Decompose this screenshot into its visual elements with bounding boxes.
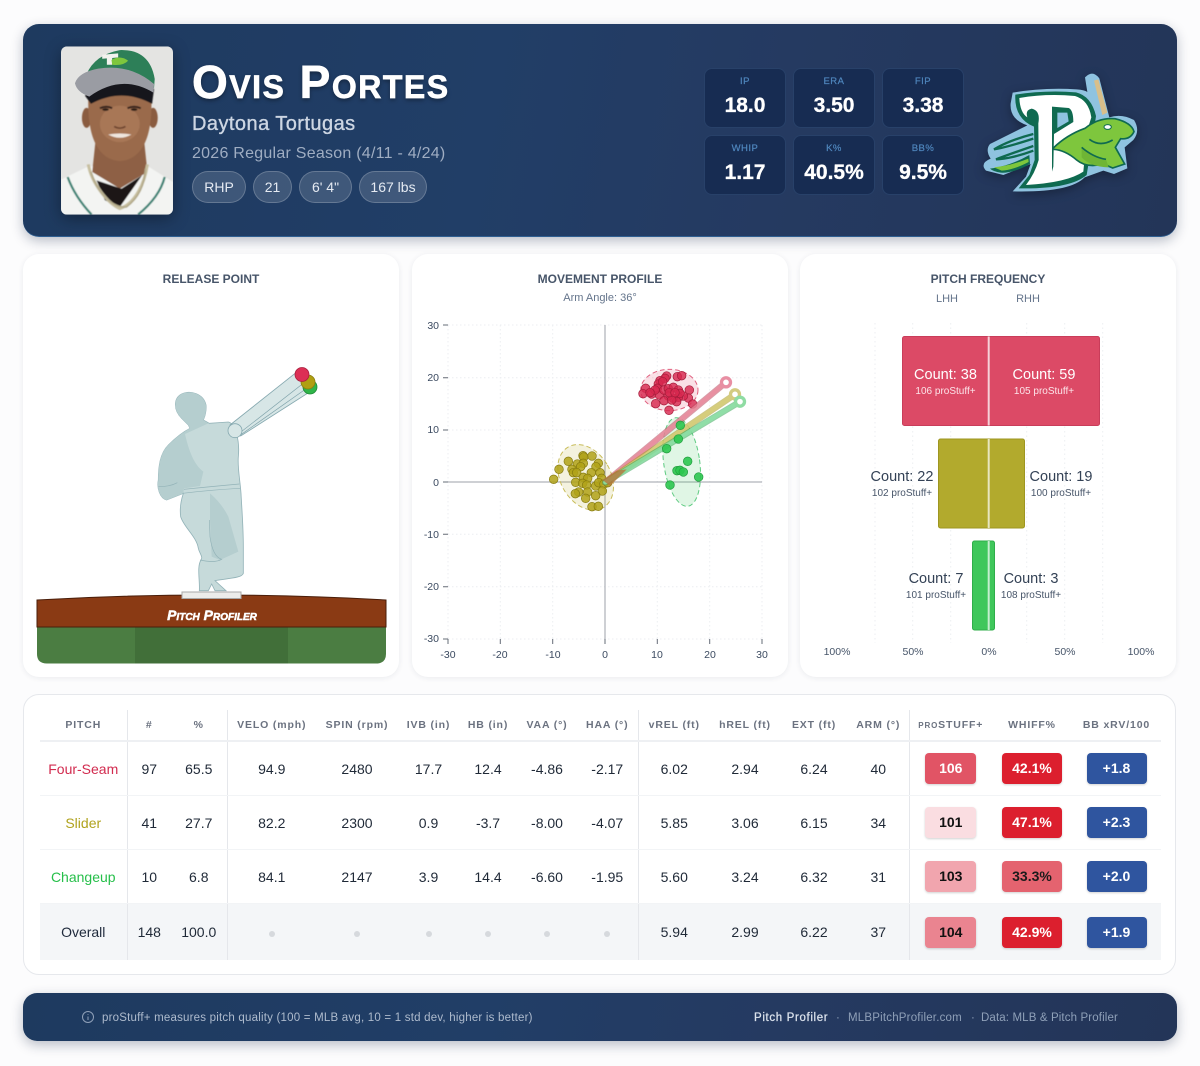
red four-seam points (639, 371, 697, 415)
row: slider (65, 807, 1148, 840)
four-seam bar (902, 336, 1100, 426)
y axis labels (424, 320, 439, 645)
four-seam bar: 105 proStuff+ (1014, 386, 1074, 397)
table header: EXT (ft) (792, 719, 836, 731)
four-seam bar: Count: 59 (1013, 367, 1075, 383)
four-seam bar: 106 proStuff+ (915, 386, 976, 397)
row: changeup: 10 (141, 868, 157, 884)
row: four-seam (48, 753, 1148, 786)
metrics table (40, 710, 1161, 960)
stat cards: 3.50 (814, 94, 854, 117)
footer credit: · (836, 1012, 840, 1024)
team logo (983, 74, 1139, 197)
arm angle end markers (721, 378, 744, 406)
frequency chart (824, 293, 1154, 658)
table header: PITCH (65, 719, 101, 731)
table header: WHIFF% (1008, 719, 1056, 731)
table header: PROSTUFF+ (918, 719, 983, 731)
heading: movement profile: MOVEMENT PROFILE (538, 272, 662, 286)
row: overall: 100.0 (181, 924, 216, 940)
batter side labels (936, 293, 1040, 305)
stat cards: 40.5% (804, 161, 864, 184)
row: slider: -4.07 (591, 814, 623, 830)
changeup bar: Count: 7 (909, 571, 963, 587)
footer credit: Data: MLB & Pitch Profiler (981, 1012, 1118, 1024)
row: changeup: 6.8 (189, 868, 208, 884)
slider bar: 102 proStuff+ (872, 488, 932, 499)
footer banner (23, 993, 1177, 1041)
batter side labels: LHH (936, 293, 958, 305)
row: overall: 2.99 (731, 924, 759, 940)
arm angle subtitle: Arm Angle: 36° (563, 292, 637, 304)
pitch profiler wordmark: Pitch Profiler (167, 607, 258, 623)
row: slider: 101 (939, 814, 962, 830)
x axis labels (440, 649, 768, 661)
row: changeup: 31 (870, 868, 886, 884)
chart axes (443, 325, 762, 644)
season: 2026 Regular Season (4/11 - 4/24) (192, 145, 445, 162)
row: four-seam: 40 (870, 760, 886, 776)
row: slider: 0.9 (419, 814, 438, 830)
x axis labels: 10 (651, 649, 663, 661)
row: overall: 6.22 (800, 924, 828, 940)
panel: release point (23, 254, 399, 677)
row: slider: 82.2 (258, 814, 285, 830)
row: overall: 5.94 (661, 924, 688, 940)
stat cards (705, 68, 964, 195)
row: slider: 34 (870, 814, 886, 830)
heading: pitch frequency: PITCH FREQUENCY (931, 272, 1045, 286)
row: four-seam: 42.1% (1012, 760, 1052, 776)
confidence ellipses (547, 369, 706, 520)
panel: movement profile (412, 254, 788, 677)
x axis labels: -10 (545, 649, 561, 661)
arm and release lines (228, 370, 313, 438)
player photo (56, 44, 179, 224)
batter side labels: RHH (1016, 293, 1040, 305)
row: overall: 37 (870, 924, 886, 940)
row: four-seam: 65.5 (185, 760, 212, 776)
footer credit: · (971, 1012, 975, 1024)
changeup bar (906, 541, 1061, 630)
table header: vREL (ft) (649, 719, 700, 731)
row: slider: 6.15 (800, 814, 828, 830)
row: slider: 5.85 (661, 814, 688, 830)
row: overall: Overall (61, 924, 105, 940)
percent axis labels: 100% (824, 646, 850, 658)
row: changeup: 6.32 (800, 868, 828, 884)
team name: Daytona Tortugas (192, 113, 356, 135)
table header: hREL (ft) (719, 719, 771, 731)
changeup bar: 108 proStuff+ (1001, 590, 1061, 601)
row: changeup: -6.60 (531, 868, 563, 884)
four-seam bar: Count: 38 (914, 367, 977, 383)
x axis labels: 30 (756, 649, 768, 661)
row: slider: +2.3 (1103, 814, 1130, 830)
player bio pills: 6' 4" (312, 179, 339, 195)
data layer (547, 369, 744, 520)
table header: IVB (in) (407, 719, 450, 731)
row: four-seam: 17.7 (415, 760, 442, 776)
pitcher mound (37, 595, 386, 627)
stat cards: FIP (915, 76, 931, 87)
arm angle lines (605, 382, 740, 482)
arm angle origin blob (603, 469, 627, 486)
table header: SPIN (rpm) (326, 719, 388, 731)
row: overall: +1.9 (1103, 924, 1130, 940)
footer credit: Pitch Profiler (754, 1012, 828, 1024)
row: overall: 104 (939, 924, 962, 940)
y axis labels: 10 (427, 424, 439, 436)
percent axis labels (824, 646, 1154, 658)
row: overall: 148 (138, 924, 161, 940)
slider bar: Count: 19 (1030, 469, 1092, 485)
y axis labels: -10 (424, 529, 439, 541)
y axis labels: 20 (427, 372, 439, 384)
row: four-seam: Four-Seam (48, 760, 118, 776)
footer credit (754, 1012, 1118, 1024)
row: changeup: 3.9 (419, 868, 438, 884)
stat cards: ERA (823, 76, 845, 87)
row: four-seam: 2.94 (731, 760, 759, 776)
row: four-seam: 94.9 (258, 760, 285, 776)
stat cards: BB% (912, 143, 934, 154)
percent axis labels: 50% (1054, 646, 1076, 658)
row: changeup: +2.0 (1103, 868, 1130, 884)
row: changeup: 33.3% (1012, 868, 1052, 884)
player bio pills (192, 171, 427, 203)
row: changeup: Changeup (51, 868, 116, 884)
row: changeup (51, 861, 1148, 894)
table header: BB xRV/100 (1083, 719, 1150, 731)
stat cards: IP (740, 76, 750, 87)
changeup bar: Count: 3 (1004, 571, 1058, 587)
frequency grid (875, 323, 1103, 643)
row: changeup: 14.4 (474, 868, 502, 884)
stat cards: WHIP (732, 143, 758, 154)
row: four-seam: 2480 (341, 760, 373, 776)
table header: VAA (°) (526, 719, 568, 731)
header banner (23, 24, 1177, 237)
row: four-seam: 106 (939, 760, 962, 776)
stat cards: 1.17 (725, 161, 765, 184)
row: four-seam: 12.4 (474, 760, 502, 776)
stat cards: K% (826, 143, 842, 154)
x axis labels: -30 (440, 649, 456, 661)
x axis labels: -20 (492, 649, 508, 661)
row: slider: 2300 (341, 814, 373, 830)
table header: ARM (°) (856, 719, 900, 731)
stat cards: 9.5% (899, 161, 947, 184)
row: overall (40, 904, 1161, 960)
player bio pills: 167 lbs (370, 179, 416, 195)
row: slider: -3.7 (476, 814, 500, 830)
x axis labels: 0 (602, 649, 608, 661)
stat cards: 3.38 (903, 94, 943, 117)
row: four-seam: 6.24 (800, 760, 828, 776)
y axis labels: -20 (424, 581, 439, 593)
row: four-seam: 97 (141, 760, 157, 776)
slider bar (871, 439, 1092, 528)
release points (295, 368, 317, 394)
y axis labels: -30 (424, 633, 439, 645)
row: changeup: 5.60 (661, 868, 688, 884)
panel: pitch metrics table (23, 694, 1176, 975)
pitcher silhouette (158, 392, 243, 591)
slider bar: Count: 22 (871, 469, 933, 485)
stat cards: 18.0 (725, 94, 765, 117)
field grass (37, 627, 386, 664)
row: changeup: 84.1 (258, 868, 285, 884)
table header: # (146, 719, 153, 731)
row: slider: 27.7 (185, 814, 212, 830)
row: four-seam: -4.86 (531, 760, 563, 776)
row: changeup: 2147 (341, 868, 373, 884)
chart grid (448, 325, 762, 639)
row: slider: 41 (141, 814, 157, 830)
yellow slider points (549, 451, 612, 511)
pitching rubber (182, 592, 241, 598)
footer credit: MLBPitchProfiler.com (848, 1012, 962, 1024)
table header: VELO (mph) (237, 719, 306, 731)
row: overall: 42.9% (1012, 924, 1052, 940)
table header: HB (in) (468, 719, 508, 731)
row: slider: -8.00 (531, 814, 563, 830)
percent axis labels: 0% (981, 646, 997, 658)
changeup bar: 101 proStuff+ (906, 590, 966, 601)
movement chart (424, 320, 768, 661)
row: slider: 47.1% (1012, 814, 1052, 830)
table header: % (194, 719, 204, 731)
icon: info (82, 1011, 94, 1023)
player bio pills: 21 (265, 179, 280, 195)
row: slider: 3.06 (731, 814, 759, 830)
row: four-seam: -2.17 (591, 760, 623, 776)
table header: HAA (°) (586, 719, 628, 731)
slider bar: 100 proStuff+ (1031, 488, 1091, 499)
percent axis labels: 50% (902, 646, 924, 658)
player name: Ovis Portes (192, 56, 450, 108)
y axis labels: 30 (427, 320, 439, 332)
row: changeup: 3.24 (731, 868, 759, 884)
player bio pills: RHP (204, 179, 234, 195)
row: four-seam: +1.8 (1103, 760, 1130, 776)
panel: pitch frequency (800, 254, 1176, 677)
heading: release point: RELEASE POINT (163, 272, 259, 286)
green changeup points (662, 421, 703, 489)
y axis labels: 0 (433, 477, 439, 489)
footer note: proStuff+ measures pitch quality (100 = MLB avg, 10 = 1 std dev, higher is better) (102, 1012, 533, 1024)
percent axis labels: 100% (1128, 646, 1154, 658)
row: changeup: 103 (939, 868, 962, 884)
row: four-seam: 6.02 (661, 760, 688, 776)
row: changeup: -1.95 (591, 868, 623, 884)
release point illustration (36, 367, 386, 664)
table header (40, 719, 1161, 960)
row: slider: Slider (65, 814, 101, 830)
x axis labels: 20 (704, 649, 716, 661)
